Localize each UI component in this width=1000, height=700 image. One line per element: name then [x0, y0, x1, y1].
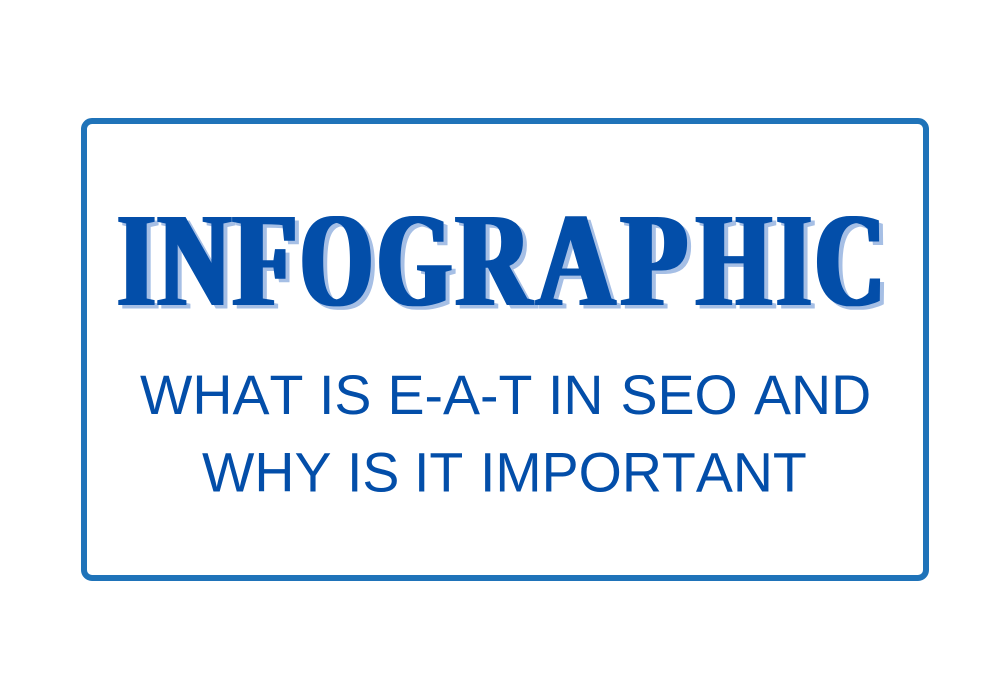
title main text: A: [537, 187, 615, 335]
title shadow: P: [625, 189, 691, 338]
title main text: F: [233, 185, 297, 334]
title shadow: I: [781, 190, 815, 338]
title shadow: [122, 188, 888, 339]
subtitle line 1: IS: [319, 364, 387, 426]
title main text: R: [456, 185, 532, 334]
title main text: H: [697, 186, 771, 335]
title main text: [118, 185, 884, 335]
subtitle line 2: WHY: [202, 442, 347, 504]
subtitle line 2: IMPORTANT: [480, 442, 807, 504]
subtitle line 2: IT: [414, 442, 479, 504]
title main text: P: [621, 186, 687, 335]
title main text: C: [815, 186, 884, 335]
subtitle: two-line question: [140, 364, 871, 504]
title shadow: A: [541, 190, 619, 338]
panel: rounded blue frame: [84, 121, 926, 578]
title shadow: N: [162, 189, 234, 338]
subtitle line 2: IS: [347, 442, 415, 504]
subtitle line 1: AND: [754, 364, 871, 426]
title shadow: O: [305, 188, 376, 338]
title shadow: H: [701, 190, 775, 339]
title: INFOGRAPHIC with offset shadow: [118, 185, 888, 339]
title main text: O: [301, 185, 372, 334]
title shadow: I: [122, 190, 159, 339]
subtitle line 1: IN: [548, 364, 619, 426]
title shadow: C: [819, 190, 888, 338]
title shadow: F: [237, 189, 301, 338]
title main text: G: [378, 186, 451, 335]
title shadow: R: [460, 188, 536, 338]
subtitle line 1: WHAT: [140, 364, 319, 426]
title main text: I: [118, 187, 155, 335]
subtitle line 1: SEO: [620, 364, 753, 426]
title shadow: G: [382, 189, 455, 339]
title main text: N: [158, 186, 230, 335]
title main text: I: [777, 187, 811, 335]
subtitle line 1: E-A-T: [388, 364, 548, 426]
